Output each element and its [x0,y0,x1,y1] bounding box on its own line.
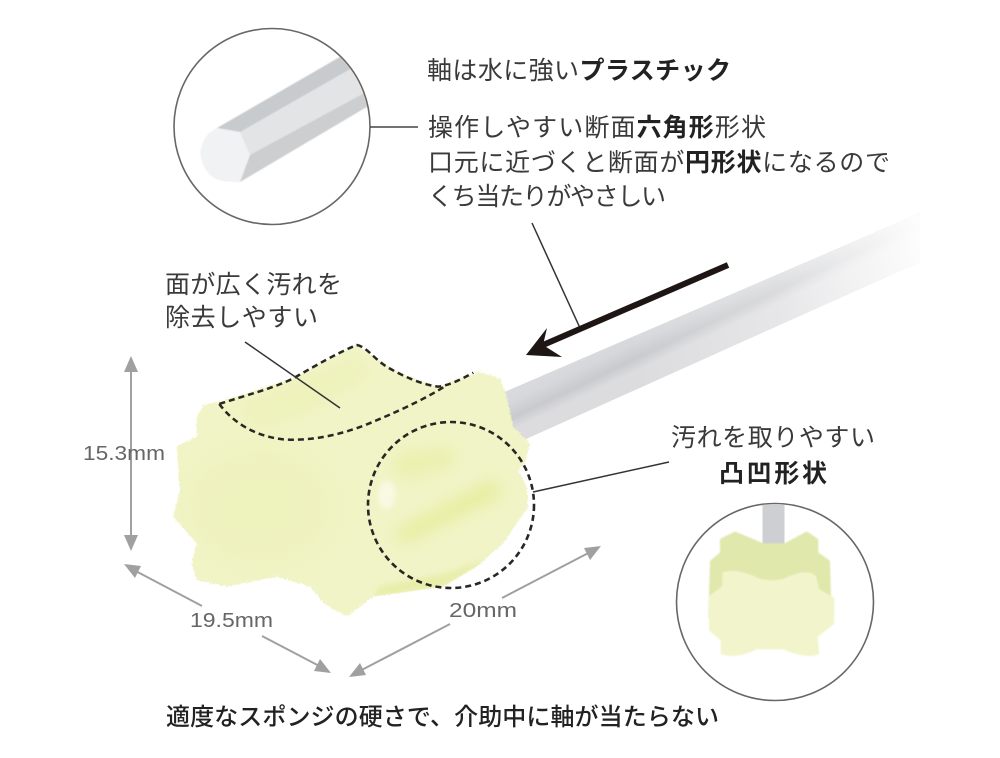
detail circle: sponge end view [676,500,874,700]
text: uneven shape: 汚れを取りやすい [671,424,875,452]
leader: uneven shape [533,462,669,492]
leader: rod tip detail [370,126,418,128]
caption: bottom: 適度なスポンジの硬さで、介助中に軸が当たらない [166,704,719,731]
detail circle: rod tip [174,28,375,224]
text: hexagonal section description: くち当たりがやさしい [428,183,666,211]
text: uneven shape: 凸凹形状 [719,460,827,488]
text: plastic shaft: 軸は水に強いプラスチック [427,57,731,85]
dimension: height [124,356,138,551]
text: uneven shape [671,424,875,488]
leader: to arrow [532,223,580,328]
text: hexagonal section description: 口元に近づくと断面が円形状になるので [428,149,890,177]
dimension: length right [349,546,601,677]
text: wide surface [165,271,342,332]
text: wide surface: 面が広く汚れを [165,271,342,299]
arrow: black direction [526,265,728,357]
text: hexagonal section description [428,114,890,211]
label: length: 20mm [449,600,517,622]
plastic shaft [495,213,920,444]
dimension: width left [124,564,331,673]
sponge head [173,345,532,616]
label: height: 15.3mm [83,443,165,465]
dashed outline: wide surface [219,345,473,440]
dashed circle: uneven shape on sponge [368,422,534,588]
label: width: 19.5mm [190,610,273,632]
text: hexagonal section description: 操作しやすい断面六角形形状 [428,114,766,142]
leader: wide surface [245,342,340,408]
text: wide surface: 除去しやすい [165,304,318,332]
